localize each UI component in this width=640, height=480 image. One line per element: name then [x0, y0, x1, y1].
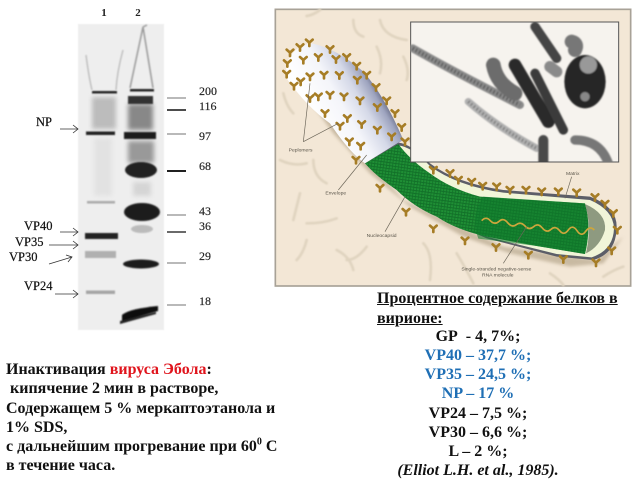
hollow end [585, 204, 605, 253]
protein labels [9, 115, 53, 293]
lane numbers [101, 7, 141, 19]
callout labels: Envelope [325, 191, 346, 197]
protein labels: VP24 [24, 279, 53, 293]
citation: (Elliot L.H. et al., 1985). [397, 462, 559, 479]
RNA strand [482, 218, 594, 234]
line: mercaptoethanol: Содержащем 5 % меркаптоэтанола и [6, 400, 275, 417]
callout labels [289, 148, 580, 279]
cut section [475, 197, 588, 254]
callout labels: Matrix [566, 171, 580, 177]
protein labels: NP [36, 115, 52, 129]
panel: gel electrophoresis [9, 7, 217, 330]
callout labels: Nucleocapsid [367, 233, 397, 239]
lane 1 smears [92, 97, 116, 196]
molecular weight ticks [167, 98, 186, 305]
panel: virion illustration [275, 9, 631, 286]
VP30: VP30 – 6,6 %; [429, 424, 527, 441]
molecular weight labels [199, 84, 217, 308]
virus rods [413, 27, 608, 163]
lane 2 bands [120, 25, 160, 324]
molecular weight labels: 97 [199, 129, 211, 143]
inactivation heading: Инактивация вируса Эбола: [6, 361, 212, 378]
lane 2 smears [128, 104, 154, 196]
molecular weight labels: 200 [199, 84, 217, 98]
molecular weight labels: 29 [199, 249, 211, 263]
lane 1 bands [85, 50, 123, 294]
matrix layer [365, 145, 614, 257]
heading line 2: вирионе: [377, 310, 443, 327]
text block: inactivation of Ebola virus [6, 361, 277, 474]
L: L – 2 %; [448, 443, 508, 460]
NP: NP – 17 % [442, 385, 514, 402]
virion shadow [290, 73, 623, 267]
virion tail dark envelope [365, 143, 617, 260]
VP35: VP35 – 24,5 %; [425, 366, 531, 383]
peplomer spikes [283, 40, 621, 266]
molecular weight labels: 43 [199, 204, 211, 218]
lane numbers: 2 [135, 7, 141, 19]
background wisps [280, 10, 623, 285]
callout lines [303, 83, 572, 263]
gel background [78, 24, 164, 330]
VP40: VP40 – 37,7 %; [425, 347, 531, 364]
line: duration: в течение часа. [6, 457, 115, 474]
protein labels: VP40 [24, 219, 52, 233]
inset electron micrograph [411, 22, 619, 163]
protein labels: VP30 [9, 250, 37, 264]
molecular weight labels: 36 [199, 219, 211, 233]
line: boiling: кипячение 2 мин в растворе, [10, 380, 218, 397]
panel background [275, 9, 631, 286]
GP: GP - 4, 7%; [436, 328, 520, 345]
inset frame [411, 22, 619, 162]
line: heating: с дальнейшим прогревание при 600 С [6, 437, 277, 455]
VP24: VP24 – 7,5 %; [429, 405, 527, 422]
protein labels: VP35 [15, 235, 43, 249]
nucleocapsid [365, 144, 588, 254]
callout labels: Single-stranded negative-sense [461, 266, 532, 272]
arrows [49, 125, 78, 298]
lane numbers: 1 [101, 7, 107, 19]
text block: protein content of virion [377, 290, 618, 479]
virion envelope silver [286, 43, 403, 163]
molecular weight labels: 68 [199, 159, 211, 173]
molecular weight labels: 18 [199, 294, 211, 308]
protein content heading: Процентное содержание белков в [377, 290, 618, 307]
molecular weight labels: 116 [199, 99, 217, 113]
line: SDS: 1% SDS, [6, 419, 67, 436]
callout labels: RNA molecule [482, 273, 514, 279]
callout labels: Peplomers [289, 148, 313, 154]
